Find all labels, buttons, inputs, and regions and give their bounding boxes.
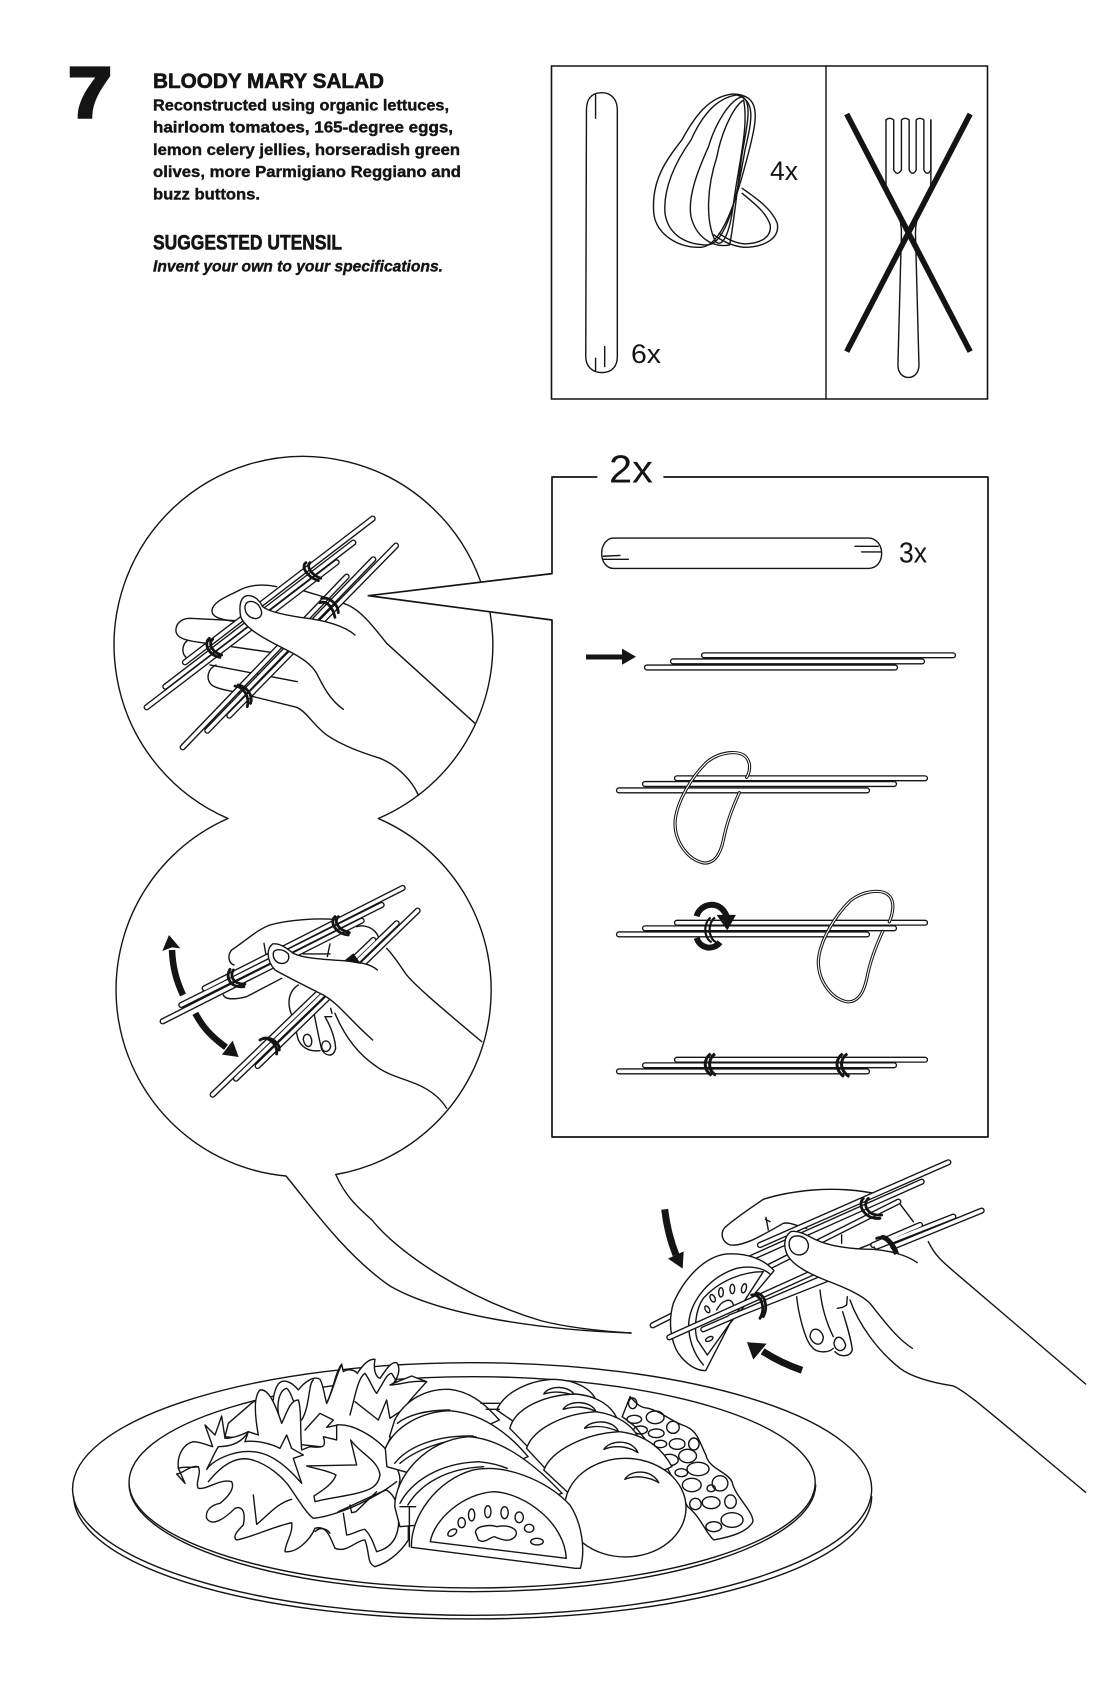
chopstick sticks xyxy=(147,519,396,747)
speech bubble outline with two circles and tail xyxy=(114,456,631,1333)
label: 2x: 2x xyxy=(609,448,654,492)
panel: materials and crossed-out fork xyxy=(552,66,988,399)
step: three staggered sticks xyxy=(647,655,953,668)
label: 3x: 3x xyxy=(899,538,927,570)
step: two finished bands xyxy=(619,1054,925,1077)
recipe description: olives, more Parmigiano Reggiano and xyxy=(153,164,461,181)
heading: bloody mary salad: BLOODY MARY SALAD xyxy=(153,70,384,93)
step: band twisted with rotation arrow xyxy=(619,891,925,1002)
icon: rubber bands xyxy=(653,94,778,247)
step number: 7 xyxy=(68,54,112,133)
icon: crossed-out fork xyxy=(847,114,970,377)
motion arrows xyxy=(162,935,239,1057)
recipe description xyxy=(153,98,461,204)
recipe description: lemon celery jellies, horseradish green xyxy=(153,142,460,159)
step: band placed around sticks xyxy=(619,753,925,863)
thumb and palm xyxy=(268,944,447,1108)
hand behind sticks xyxy=(722,1189,1086,1384)
recipe description: Reconstructed using organic lettuces, xyxy=(153,98,449,114)
panel: stick assembly instructions xyxy=(368,448,988,1137)
chopstick sticks xyxy=(163,888,418,1095)
icon: single stick xyxy=(602,538,882,568)
lettuce xyxy=(177,1359,427,1567)
upper chopstick sticks xyxy=(653,1162,982,1325)
arrow: stack sticks xyxy=(586,649,636,665)
plate rims xyxy=(73,1363,872,1619)
hand serving a tomato wedge xyxy=(653,1162,1086,1492)
lower chopstick sticks over tomato xyxy=(669,1263,833,1337)
label: 6x: 6x xyxy=(631,339,662,369)
plate of salad xyxy=(73,1359,872,1619)
icon: wooden stick xyxy=(586,93,617,373)
recipe text block xyxy=(153,70,461,276)
hand holding utensil, top circle xyxy=(147,519,475,795)
utensil note: Invent your own to your specifications. xyxy=(153,258,443,276)
thumb and palm xyxy=(785,1231,1086,1492)
recipe description: buzz buttons. xyxy=(153,186,260,204)
rubber bands on sticks xyxy=(228,917,360,1054)
relish of olives xyxy=(622,1397,753,1540)
tomato wedges xyxy=(385,1389,583,1568)
thumb xyxy=(240,596,355,709)
panel frame with callout pointer xyxy=(368,477,988,1137)
rubber bands on sticks xyxy=(207,563,338,707)
recipe description: hairloom tomatoes, 165-degree eggs, xyxy=(153,120,453,136)
hand holding utensil, bottom circle xyxy=(162,888,482,1108)
tomato wedge held xyxy=(671,1254,774,1371)
hand fingers behind sticks xyxy=(176,585,475,795)
heading: suggested utensil: SUGGESTED UTENSIL xyxy=(153,232,342,254)
egg halves xyxy=(497,1379,686,1557)
label: 4x: 4x xyxy=(770,156,798,186)
motion arrows xyxy=(665,1209,802,1370)
rubber bands on sticks xyxy=(752,1198,897,1318)
hand fingers behind sticks xyxy=(223,919,482,1055)
